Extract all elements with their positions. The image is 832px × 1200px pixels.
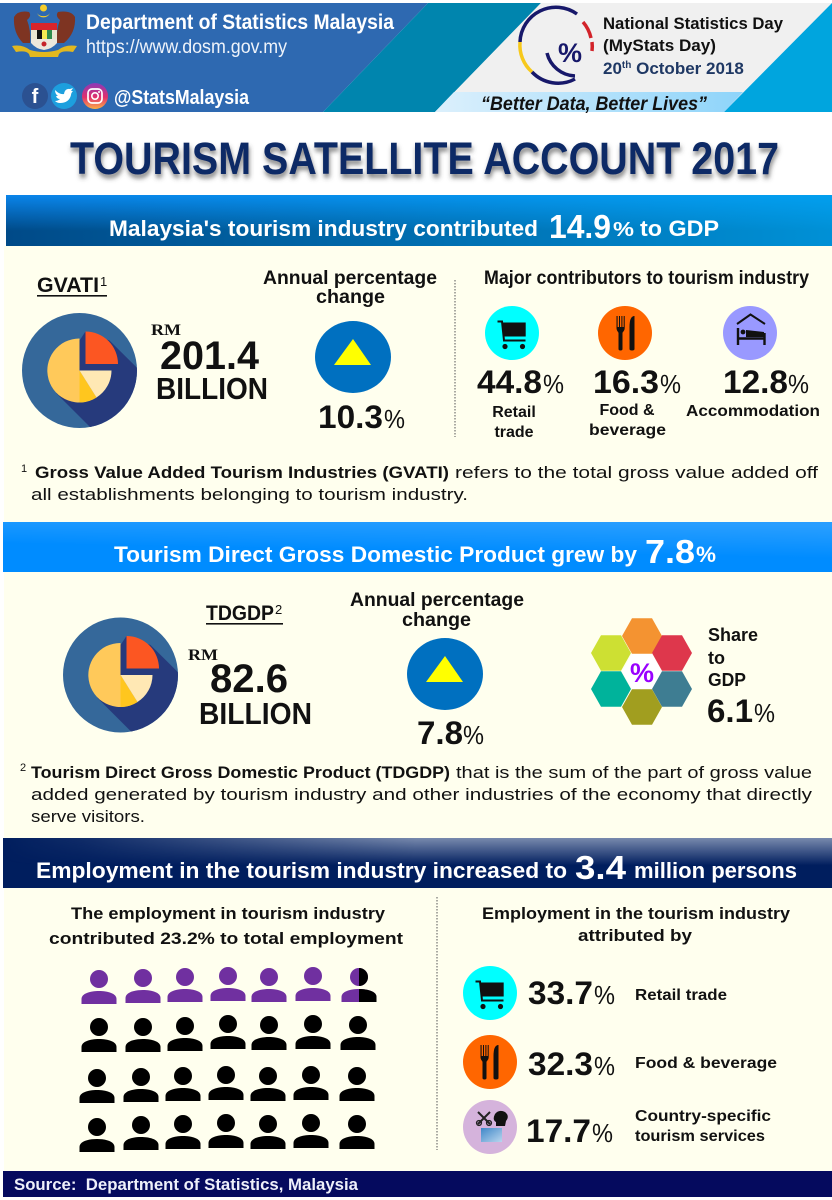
- footnote 2: serve visitors.: [31, 807, 145, 826]
- section banner 1: to GDP: [640, 216, 719, 241]
- row: food and beverage: Food & beverage: [635, 1055, 777, 1072]
- header: event date: 20: [603, 59, 622, 78]
- contributor: retail trade: 44.8: [477, 364, 542, 400]
- annual percentage change heading: [350, 590, 524, 631]
- footnote 1: all establishments belonging to tourism industry.: [31, 485, 468, 504]
- footnote 2: added generated by tourism industry and other industries of the economy that directly: [31, 785, 813, 804]
- source footer: [3, 1171, 832, 1197]
- value: RM 82.6 billion: 82.6: [210, 657, 288, 701]
- row: retail trade: 33.7: [528, 975, 593, 1011]
- icon: pie chart GVATI: [22, 313, 160, 456]
- share to GDP: 6.1: [707, 693, 753, 729]
- header: website: https://www.dosm.gov.my: [86, 37, 287, 58]
- icon: up triangle: [315, 321, 391, 393]
- contributor: food and beverage: Food &: [599, 402, 655, 419]
- footnote 1: refers to the total gross value added off: [455, 463, 818, 482]
- employment share heading: [49, 904, 403, 948]
- panel: GDP contribution: [6, 195, 832, 504]
- header: tagline: “Better Data, Better Lives”: [481, 94, 707, 115]
- icon: up triangle: [407, 638, 483, 710]
- major contributors heading: Major contributors to tourism industry: [484, 268, 809, 289]
- contributor: food and beverage: 16.3: [593, 364, 659, 400]
- annual percentage change heading: Annual percentage: [350, 590, 524, 611]
- row: country-specific services: [463, 1100, 771, 1154]
- attribution heading: [482, 904, 791, 945]
- footnote 1: Gross Value Added Tourism Industries (GVATI): [35, 463, 449, 482]
- contributor: food and beverage: beverage: [589, 422, 666, 439]
- value: RM 201.4 billion: BILLION: [156, 371, 268, 406]
- section banner 2: %: [696, 542, 716, 567]
- contributor: retail trade: [477, 306, 564, 441]
- value: 7.8%: 7.8: [417, 715, 463, 751]
- row: food and beverage: [463, 1035, 777, 1089]
- contributor: retail trade: trade: [494, 424, 534, 441]
- contributor: food and beverage: [589, 306, 681, 439]
- icon: Malaysia coat of arms: [12, 4, 77, 57]
- icon: pie chart TDGDP: [63, 618, 200, 761]
- section banner 1: Malaysia's tourism industry contributed: [109, 216, 538, 241]
- annual percentage change heading: Annual percentage: [263, 268, 437, 289]
- attribution heading: attributed by: [578, 926, 693, 945]
- cream page background: [4, 246, 832, 1172]
- icon: twitter: [51, 83, 77, 109]
- contributor: accommodation: [686, 306, 820, 420]
- value: RM 201.4 billion: [151, 322, 268, 406]
- share to GDP: [707, 625, 775, 729]
- footnote 1: [21, 463, 818, 504]
- panel: employment: [3, 838, 832, 1154]
- contributor: retail trade: Retail: [492, 404, 536, 421]
- footnote 1: 1: [21, 463, 27, 475]
- section banner 2: [3, 522, 832, 572]
- row: food and beverage: 32.3: [528, 1046, 593, 1082]
- share to GDP: GDP: [708, 670, 746, 690]
- heading: TDGDP: TDGDP: [206, 602, 274, 625]
- value: 7.8%: [417, 715, 484, 751]
- value: RM 82.6 billion: BILLION: [199, 696, 312, 731]
- section banner 2: 7.8: [645, 533, 695, 570]
- annual percentage change heading: [263, 268, 437, 308]
- section banner 3: 3.4: [575, 849, 627, 886]
- value: RM 201.4 billion: 201.4: [160, 334, 260, 378]
- employment share heading: contributed 23.2% to total employment: [49, 929, 403, 948]
- section banner 2: Tourism Direct Gross Domestic Product grew by: [114, 542, 638, 567]
- heading: GVATI: GVATI: [37, 274, 99, 297]
- footnote 2: Tourism Direct Gross Domestic Product (TDGDP): [31, 763, 450, 782]
- row: country-specific services: tourism services: [635, 1128, 765, 1145]
- icon: instagram: [82, 83, 108, 109]
- share to GDP: Share: [708, 625, 758, 645]
- row: food and beverage: %: [594, 1051, 615, 1081]
- header: social handle: @StatsMalaysia: [114, 87, 250, 109]
- section banner 3: million persons: [634, 858, 797, 883]
- header: department name: Department of Statistics Malaysia: [86, 11, 394, 34]
- row: retail trade: %: [594, 980, 615, 1010]
- source footer: Source: Department of Statistics, Malaysia: [14, 1176, 359, 1194]
- annual percentage change heading: change: [402, 610, 471, 631]
- pictogram: 23.2 percent of people: [80, 967, 376, 1152]
- icon: hexagon cluster: %: [630, 658, 654, 688]
- panel: TDGDP: [3, 522, 832, 826]
- header: event date: October 2018: [631, 59, 744, 78]
- value: 10.3%: 10.3: [318, 399, 383, 435]
- contributor: accommodation: 12.8: [723, 364, 788, 400]
- row: retail trade: [463, 966, 727, 1020]
- value: RM 201.4 billion: RM: [151, 322, 181, 339]
- attribution heading: Employment in the tourism industry: [482, 904, 791, 923]
- value: RM 82.6 billion: [188, 647, 312, 731]
- icon: MyStats Day logo: %: [558, 38, 582, 68]
- row: retail trade: Retail trade: [635, 987, 727, 1004]
- contributor: accommodation: %: [788, 369, 809, 399]
- row: country-specific services: 17.7: [526, 1113, 591, 1149]
- icon: MyStats Day logo: [520, 7, 592, 83]
- value: 7.8%: %: [463, 720, 484, 750]
- footnote 2: that is the sum of the part of gross value: [456, 763, 812, 782]
- value: RM 82.6 billion: RM: [188, 647, 218, 664]
- row: country-specific services: Country-specific: [635, 1108, 771, 1125]
- icon: facebook: f: [32, 86, 39, 108]
- section banner 1: %: [613, 219, 634, 241]
- share to GDP: to: [708, 648, 725, 668]
- header: event name: National Statistics Day: [603, 14, 784, 33]
- icon: facebook: [22, 83, 48, 109]
- header: event date: th: [622, 60, 631, 71]
- header banner: [0, 0, 832, 115]
- value: 10.3%: %: [384, 404, 405, 434]
- section banner 1: [6, 195, 832, 246]
- annual percentage change heading: change: [316, 287, 385, 308]
- heading: TDGDP: 2: [275, 602, 282, 617]
- header: event subtitle: (MyStats Day): [603, 36, 716, 55]
- section banner 3: Employment in the tourism industry increased to: [36, 858, 567, 883]
- section banner 3: [3, 838, 832, 888]
- employment share heading: The employment in tourism industry: [71, 904, 386, 923]
- footnote 2: [20, 762, 813, 826]
- contributor: food and beverage: %: [660, 369, 681, 399]
- contributor: accommodation: Accommodation: [686, 403, 820, 420]
- footnote 2: 2: [20, 762, 26, 774]
- share to GDP: %: [754, 698, 775, 728]
- row: country-specific services: %: [592, 1118, 613, 1148]
- section banner 1: 14.9: [549, 208, 611, 245]
- contributor: retail trade: %: [543, 369, 564, 399]
- heading: GVATI: 1: [100, 274, 107, 289]
- icon: hexagon cluster: [591, 618, 692, 725]
